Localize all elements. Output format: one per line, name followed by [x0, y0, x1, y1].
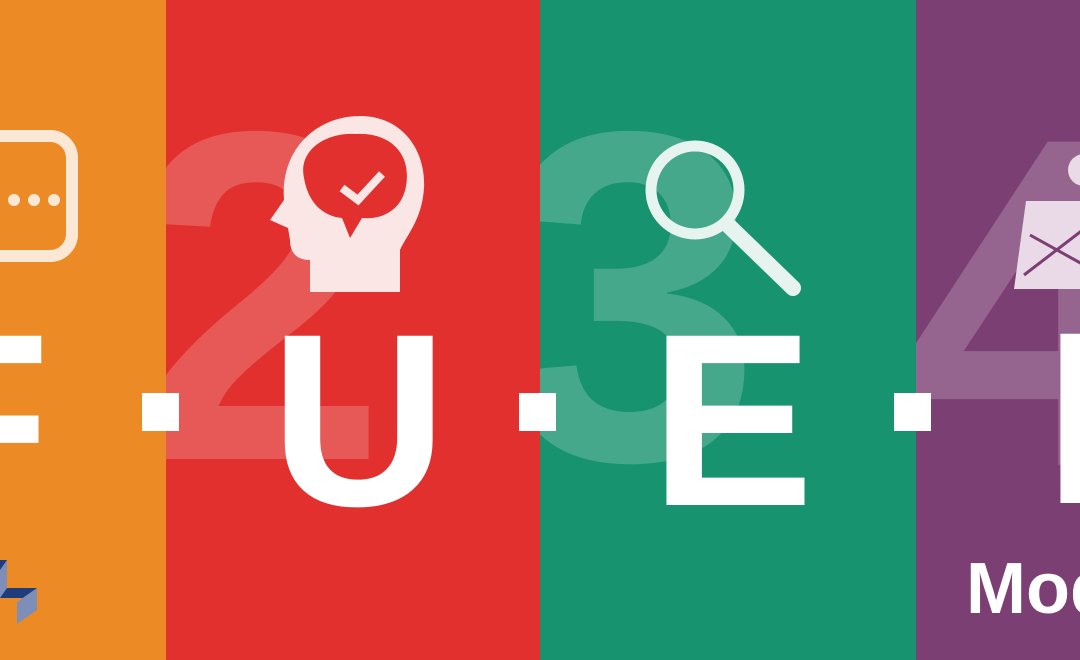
icon: chat bubble: [0, 130, 78, 262]
panel: purple M: [916, 0, 1080, 660]
dot 3: [894, 393, 931, 431]
panel: orange F: [0, 0, 166, 660]
panel: green E: [540, 0, 916, 660]
icon: head with brain: [270, 116, 424, 292]
dot 1: [142, 393, 179, 431]
icon: magnifier: [646, 140, 801, 296]
panel: red U: [166, 0, 540, 660]
icon: person with paper: [1014, 154, 1080, 289]
icon: blue steps: [0, 560, 37, 624]
dot 2: [519, 393, 556, 431]
letter E: E: [650, 283, 814, 558]
letter U: U: [270, 283, 448, 558]
